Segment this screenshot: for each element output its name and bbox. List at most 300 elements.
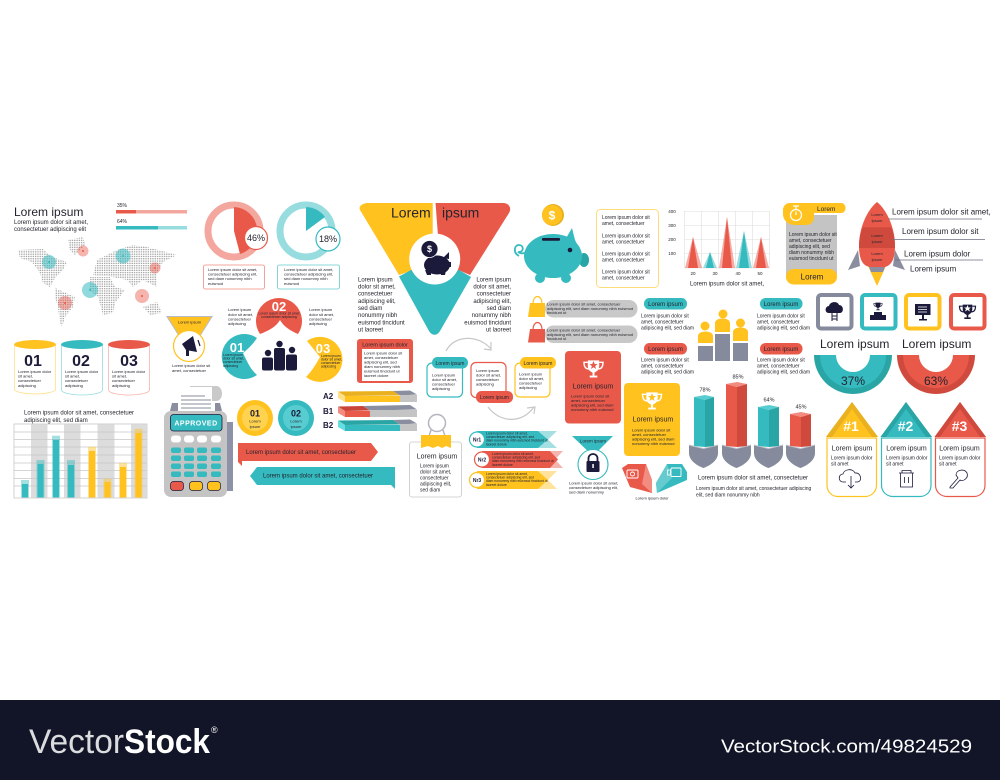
coin 01: 01 bbox=[250, 408, 260, 418]
coin 02: 02 bbox=[291, 408, 301, 418]
funnel title: ipsum bbox=[442, 204, 479, 220]
funnel right text: Lorem ipsum bbox=[476, 278, 511, 284]
half donut 37%: 37% bbox=[841, 374, 865, 388]
cycle diagram with people: adipiscing bbox=[228, 321, 246, 326]
stopwatch card bbox=[783, 203, 846, 284]
half donut 63%: 63% bbox=[924, 374, 948, 388]
flow step yellow: consectetuer bbox=[519, 380, 543, 386]
funnel title: Lorem bbox=[391, 204, 431, 220]
cylinder 03: 03 bbox=[120, 353, 138, 370]
coin 01 bbox=[237, 400, 273, 436]
donut chart 46%: 46% bbox=[247, 233, 265, 243]
lock badge: sed diam nonummy bbox=[569, 490, 604, 494]
clipped note: Lorem ipsum bbox=[417, 454, 457, 460]
funnel segment red bbox=[436, 203, 510, 275]
flow step yellow: Lorem ipsum bbox=[519, 372, 543, 376]
trophy card red bbox=[565, 351, 621, 424]
area chart: 50 bbox=[757, 271, 763, 276]
ribbon Nr1: Nr1 bbox=[473, 438, 481, 444]
shopping list row yellow: tincidunt ut bbox=[547, 310, 567, 315]
cycle diagram with people: Lorem ipsum bbox=[309, 307, 333, 312]
icon tile: cloud money tree bbox=[818, 295, 852, 328]
icon: payment terminal bbox=[164, 386, 233, 497]
footer bar: Stock bbox=[124, 723, 210, 761]
trophy card yellow: amet, consectetuer bbox=[632, 432, 667, 437]
donut chart 18% bbox=[280, 205, 340, 257]
icon: gold coin: $ bbox=[549, 208, 556, 222]
card #2: Lorem ipsum dolor bbox=[886, 456, 928, 462]
cylinder 03: Lorem ipsum dolor bbox=[112, 369, 146, 374]
progress bars: 35% bbox=[117, 203, 128, 209]
clipped note: adipiscing elit, bbox=[420, 482, 451, 488]
cylinder 02 bbox=[61, 340, 103, 395]
ribbon Nr2: diam nonummy nibh euismod tincidunt ut bbox=[492, 459, 554, 463]
card #1 bbox=[826, 402, 878, 496]
segment 01: adipiscing bbox=[223, 364, 238, 368]
ribbon Nr3 bbox=[470, 471, 557, 489]
cylinder 01: 01 bbox=[24, 353, 42, 370]
ribbon Nr1 bbox=[470, 431, 557, 448]
icon: piggy bank in circle bbox=[409, 234, 460, 284]
ribbon Nr1: diam nonummy nibh euismod tincidunt ut bbox=[486, 438, 548, 442]
text box teal: Lorem ipsum dolor sit amet, bbox=[284, 267, 333, 272]
icon: piggy bank in circle: $ bbox=[427, 244, 432, 254]
half donut 37% bbox=[814, 337, 892, 394]
flow step red: Lorem ipsum bbox=[476, 368, 500, 373]
card #3: sit amet bbox=[939, 462, 957, 468]
red text callout: Lorem ipsum dolor sit bbox=[364, 350, 403, 356]
ribbon Nr2: Nr2 bbox=[478, 458, 486, 464]
rocket bbox=[848, 202, 905, 286]
funnel left text: consectetuer bbox=[358, 292, 392, 298]
cylinder 03: consectetuer bbox=[112, 378, 136, 383]
rocket: ipsum bbox=[872, 257, 883, 262]
ribbon teal: Lorem ipsum dolor sit amet, consectetuer bbox=[263, 474, 373, 480]
funnel right text: consectetuer bbox=[477, 292, 511, 298]
funnel left text: ut laoreet bbox=[358, 328, 383, 334]
funnel right text bbox=[464, 278, 511, 334]
megaphone funnel badge: Lorem ipsum dolor sit bbox=[172, 363, 211, 368]
ribbon Nr2: Lorem ipsum dolor sit amet, bbox=[492, 452, 534, 456]
arrow: flow bottom bbox=[488, 407, 535, 419]
funnel right text: adipiscing elit, bbox=[473, 299, 511, 305]
funnel right text: euismod tincidunt bbox=[464, 320, 511, 326]
text box teal: consectetuer adipiscing elit, bbox=[284, 272, 333, 277]
card #3: #3 bbox=[952, 418, 967, 434]
ribbon Nr2 bbox=[474, 451, 563, 468]
stopwatch card: Lorem ipsum dolor sit bbox=[789, 232, 837, 238]
ribbon Nr3: diam nonummy nibh euismod tincidunt ut bbox=[486, 479, 548, 483]
arrow: flow top bbox=[446, 338, 491, 351]
bar B2: B2 bbox=[323, 421, 334, 430]
stopwatch card: Lorem bbox=[817, 206, 835, 213]
funnel left text: dolor sit amet, bbox=[358, 284, 396, 290]
clipped note: Lorem ipsum bbox=[420, 464, 449, 470]
bar 78%: 78% bbox=[699, 388, 711, 394]
rocket labels: Lorem ipsum dolor sit amet, bbox=[892, 208, 991, 216]
camera gem icons bbox=[622, 464, 687, 500]
lock badge: consectetuer adipiscing elit, bbox=[569, 485, 618, 490]
podium label red right: amet, consectetuer bbox=[757, 364, 800, 370]
ribbon Nr1: consectetuer adipiscing elit, sed bbox=[486, 435, 534, 439]
podium label red right bbox=[757, 343, 810, 376]
podium label teal left: Lorem ipsum bbox=[648, 302, 683, 308]
cylinder 03 bbox=[108, 340, 150, 395]
podium label teal right: amet, consectetuer bbox=[757, 320, 800, 326]
segment 03 bbox=[306, 337, 342, 382]
podium label teal left: Lorem ipsum dolor sit bbox=[641, 314, 689, 320]
text box red bbox=[204, 265, 264, 289]
rocket labels: Lorem ipsum dolor bbox=[904, 250, 971, 258]
list box: amet, consectetuer bbox=[602, 221, 645, 227]
3D bar chart bbox=[689, 374, 815, 468]
bar 45%: 45% bbox=[795, 404, 807, 410]
podium label red left bbox=[641, 343, 694, 376]
flow step teal: adipiscing bbox=[432, 386, 450, 391]
podium label teal right bbox=[757, 298, 810, 332]
footer bar: ® bbox=[211, 725, 218, 735]
segment 01: dolor sit amet, bbox=[223, 356, 244, 360]
ribbon Nr2: consectetuer adipiscing elit, sed bbox=[492, 456, 540, 460]
clipped note bbox=[410, 414, 462, 497]
bar chart bbox=[14, 424, 147, 498]
trophy card red: Lorem ipsum bbox=[573, 384, 613, 390]
funnel left text: nonummy nibh bbox=[358, 313, 397, 319]
flow step teal: Lorem ipsum bbox=[436, 361, 464, 367]
flow step red bbox=[471, 362, 513, 403]
ribbon Nr3: consectetuer adipiscing elit, sed bbox=[486, 476, 534, 480]
half donut 63% bbox=[897, 337, 975, 394]
3D bar chart caption: Lorem ipsum dolor sit amet, consectetuer adipiscing bbox=[696, 486, 812, 492]
rocket: Lorem bbox=[871, 251, 883, 256]
flow step red: adipiscing bbox=[476, 382, 494, 386]
cycle diagram with people: consectetuer bbox=[228, 316, 252, 322]
rocket labels bbox=[888, 208, 991, 274]
flow step teal: Lorem ipsum bbox=[432, 372, 456, 378]
megaphone funnel badge: Lorem ipsum bbox=[178, 320, 202, 324]
area chart: 200 bbox=[668, 237, 676, 242]
card #1: Lorem ipsum dolor bbox=[831, 456, 873, 462]
coin 01: ipsum bbox=[250, 424, 261, 429]
shopping list row yellow bbox=[528, 296, 638, 318]
funnel left text: adipiscing elit, bbox=[358, 299, 396, 305]
red text callout bbox=[357, 339, 413, 383]
text box red: Lorem ipsum dolor sit amet, bbox=[208, 267, 257, 272]
card #1: #1 bbox=[843, 418, 859, 434]
segment 01: 01 bbox=[230, 340, 244, 355]
ribbon Nr3: Nr3 bbox=[473, 478, 481, 484]
world map with location markers bbox=[18, 237, 177, 327]
funnel left text: euismod tincidunt bbox=[358, 320, 405, 326]
3D stacked bars bbox=[323, 390, 417, 431]
podium label teal left bbox=[641, 298, 694, 332]
ribbon teal bbox=[250, 467, 395, 489]
trophy card yellow: nonummy nibh euismod bbox=[632, 441, 674, 446]
stopwatch card: euismod tincidunt ut bbox=[789, 256, 834, 262]
megaphone funnel badge bbox=[166, 316, 213, 373]
cycle diagram with people: Lorem ipsum bbox=[228, 307, 252, 312]
text box red: euismod bbox=[208, 281, 223, 286]
shopping list row yellow: adipiscing elit, sed diam nonummy nibh euismod bbox=[547, 306, 633, 311]
heading: world map title bbox=[14, 205, 88, 233]
red text callout: Lorem ipsum dolor bbox=[362, 342, 408, 348]
donut chart 18%: 18% bbox=[319, 234, 337, 244]
cylinder 03: sit amet, bbox=[112, 374, 127, 378]
segment 03: 03 bbox=[316, 341, 330, 356]
flow step teal: consectetuer bbox=[432, 382, 456, 386]
camera gem icons: Lorem ipsum dolor bbox=[635, 496, 669, 500]
rocket: ipsum bbox=[872, 239, 883, 244]
segment 01: consectetuer bbox=[223, 360, 243, 364]
cylinder 02: 02 bbox=[72, 353, 90, 370]
coin 02: Lorem bbox=[290, 418, 302, 424]
podium label red right: Lorem ipsum dolor sit bbox=[757, 358, 805, 364]
footer bar: Vector bbox=[29, 723, 124, 761]
icon: people bbox=[262, 341, 297, 370]
text box teal: sed diam nonummy nibh bbox=[284, 276, 328, 281]
3D bar chart caption bbox=[696, 476, 812, 498]
trophy card yellow: Lorem ipsum bbox=[633, 416, 673, 424]
shopping list row red bbox=[528, 322, 638, 343]
trophy card yellow: adipiscing elit, sed diam bbox=[632, 436, 675, 442]
progress bars bbox=[116, 203, 187, 230]
icon: people on podium bbox=[698, 310, 748, 361]
segment 03: dolor sit amet, bbox=[321, 358, 342, 362]
funnel right text: sed diam bbox=[487, 306, 511, 312]
segment 03: adipiscing bbox=[321, 364, 336, 368]
podium label red left: Lorem ipsum bbox=[648, 347, 683, 353]
coin 02 bbox=[278, 400, 314, 436]
footer bar: VectorStock.com/49824529 bbox=[721, 736, 972, 756]
area chart: 20 bbox=[690, 271, 696, 276]
podium label red left: Lorem ipsum dolor sit bbox=[641, 358, 689, 364]
card #1: Lorem ipsum bbox=[832, 446, 872, 452]
card #2 bbox=[880, 402, 932, 496]
stopwatch card: adipiscing elit, sed bbox=[789, 244, 830, 250]
rocket labels: Lorem ipsum bbox=[910, 264, 957, 274]
icon: key bbox=[950, 470, 967, 488]
funnel right text: ut laoreet bbox=[486, 328, 511, 334]
bar 64%: 64% bbox=[763, 398, 775, 404]
shopping list row red: tincidunt ut bbox=[547, 336, 567, 341]
icon: teal piggy bank bbox=[515, 228, 589, 283]
area chart bbox=[668, 209, 770, 288]
flow step red: consectetuer bbox=[476, 377, 500, 382]
cylinder 02: adipiscing bbox=[65, 383, 83, 388]
area chart: 40 bbox=[735, 271, 741, 276]
funnel left text: Lorem ipsum bbox=[358, 278, 393, 284]
cycle diagram with people: dolor sit amet, bbox=[228, 312, 253, 317]
cylinder 02: sit amet, bbox=[65, 374, 80, 378]
cycle diagram with people bbox=[222, 298, 342, 382]
red text callout: adipiscing elit, sed bbox=[364, 360, 397, 364]
cylinder 02: consectetuer bbox=[65, 378, 89, 383]
segment 02: consectetuer adipiscing bbox=[261, 315, 297, 319]
flow step red: Lorem ipsum bbox=[480, 395, 509, 401]
segment 02: 02 bbox=[272, 299, 286, 314]
area chart: 30 bbox=[712, 271, 718, 276]
icon tile: presentation board bbox=[906, 295, 940, 328]
funnel left text bbox=[358, 278, 405, 334]
icon: payment terminal: APPROVED bbox=[174, 420, 218, 428]
funnel heading bbox=[360, 203, 433, 275]
half donut 63%: Lorem ipsum bbox=[902, 337, 971, 351]
stopwatch card: Lorem bbox=[801, 272, 824, 282]
heading: world map title: Lorem ipsum dolor sit amet, bbox=[14, 220, 88, 226]
area chart: Lorem ipsum dolor sit amet, bbox=[690, 282, 764, 288]
list box: Lorem ipsum dolor sit bbox=[602, 234, 650, 240]
funnel segment yellow bbox=[360, 203, 433, 275]
flow step red: dolor sit amet, bbox=[476, 372, 501, 378]
shopping list row red: adipiscing elit, sed diam nonummy nibh euismod bbox=[547, 332, 633, 337]
red text callout: amet, consectetuer bbox=[364, 355, 399, 360]
text box teal: euismod bbox=[284, 281, 299, 286]
clipped note: consectetuer bbox=[420, 476, 449, 482]
icon: gold coin bbox=[542, 204, 564, 226]
coin 02: ipsum bbox=[291, 424, 302, 429]
red text callout: diam nonummy nibh bbox=[364, 364, 400, 369]
trophy card yellow bbox=[624, 383, 680, 456]
lock badge: Lorem ipsum dolor sit amet, bbox=[569, 480, 618, 486]
ribbon Nr2: laoreet dolore bbox=[492, 463, 513, 467]
area chart: 100 bbox=[668, 251, 676, 256]
podium label teal right: adipiscing elit, sed diam bbox=[757, 326, 810, 332]
cycle diagram with people: adipiscing bbox=[309, 321, 327, 326]
flow step teal bbox=[427, 357, 468, 397]
icon: trash can bbox=[899, 470, 914, 487]
footer bar bbox=[0, 700, 1000, 780]
trophy card red: Lorem ipsum dolor sit bbox=[571, 394, 610, 398]
card #2: sit amet bbox=[886, 462, 904, 468]
trophy card yellow: Lorem ipsum dolor sit bbox=[632, 428, 671, 432]
cylinder 01: sit amet, bbox=[18, 374, 33, 378]
podium label red right: Lorem ipsum bbox=[764, 347, 798, 353]
podium label red left: amet, consectetuer bbox=[641, 364, 684, 370]
megaphone funnel badge: amet, consectetuer bbox=[172, 368, 207, 373]
funnel right text: dolor sit amet, bbox=[473, 284, 511, 290]
funnel left text: sed diam bbox=[358, 306, 382, 312]
flow step teal: dolor sit amet, bbox=[432, 377, 457, 382]
cylinder 01: consectetuer bbox=[18, 378, 42, 383]
list box: amet, consectetuer bbox=[602, 240, 645, 246]
podium label red left: adipiscing elit, sed diam bbox=[641, 370, 694, 376]
card #1: sit amet bbox=[831, 462, 849, 468]
half donut 37%: Lorem ipsum bbox=[820, 337, 889, 351]
rocket: Lorem bbox=[871, 212, 883, 217]
card #3: Lorem ipsum dolor bbox=[939, 456, 981, 462]
text box teal bbox=[278, 265, 340, 289]
segment 03: Lorem ipsum bbox=[321, 354, 341, 358]
funnel segment teal bbox=[399, 270, 471, 335]
bar chart caption bbox=[24, 410, 134, 424]
ribbon Nr1: Lorem ipsum dolor sit amet, bbox=[486, 432, 528, 436]
trophy card red: amet, consectetuer bbox=[571, 398, 606, 403]
flow step yellow: adipiscing bbox=[519, 385, 537, 390]
ribbon red bbox=[238, 443, 378, 466]
icon tile: star trophy bbox=[951, 295, 984, 328]
icon: cloud download bbox=[839, 470, 861, 488]
funnel right text: nonummy nibh bbox=[472, 313, 511, 319]
segment 02 bbox=[256, 298, 302, 334]
bar 85%: 85% bbox=[732, 374, 744, 380]
podium label teal left: amet, consectetuer bbox=[641, 320, 684, 326]
cycle diagram with people: consectetuer bbox=[309, 316, 333, 322]
bar A2: A2 bbox=[323, 392, 334, 401]
progress bars: 64% bbox=[117, 219, 128, 225]
3D bar chart caption: Lorem ipsum dolor sit amet, consectetuer bbox=[698, 476, 808, 482]
bar chart caption: Lorem ipsum dolor sit amet, consectetuer bbox=[24, 410, 134, 416]
cylinder 01: adipiscing bbox=[18, 383, 36, 388]
segment 01 bbox=[222, 334, 257, 379]
podium label teal left: adipiscing elit, sed diam bbox=[641, 326, 694, 332]
area chart: 300 bbox=[668, 223, 676, 228]
list box: amet, consectetuer bbox=[602, 276, 645, 282]
stopwatch card: amet, consectetuer bbox=[789, 238, 832, 244]
segment 01: Lorem ipsum bbox=[223, 353, 243, 357]
area chart: 400 bbox=[668, 209, 676, 214]
list box bbox=[596, 210, 658, 288]
card #3: Lorem ipsum bbox=[939, 446, 980, 452]
red text callout: laoreet dolore bbox=[364, 373, 389, 378]
heading: world map title: Lorem ipsum bbox=[14, 205, 83, 219]
lock badge: Lorem ipsum bbox=[580, 438, 606, 444]
card #2: Lorem ipsum bbox=[886, 446, 927, 452]
icon tile: podium trophy bbox=[862, 295, 896, 328]
bar B1: B1 bbox=[323, 407, 334, 416]
podium label red right: adipiscing elit, sed diam bbox=[757, 370, 810, 376]
cylinder 01: Lorem ipsum dolor bbox=[18, 369, 52, 374]
card #2: #2 bbox=[898, 418, 913, 434]
lock badge bbox=[569, 436, 618, 494]
funnel title bbox=[391, 204, 479, 220]
list box: Lorem ipsum dolor sit bbox=[602, 252, 650, 258]
coin 01: Lorem bbox=[249, 418, 261, 424]
ribbon Nr3: Lorem ipsum dolor sit amet, bbox=[486, 472, 528, 476]
rocket: ipsum bbox=[872, 218, 883, 223]
trophy card red: nonummy nibh euismod bbox=[571, 407, 613, 412]
ribbon Nr1: laoreet dolore bbox=[486, 442, 507, 446]
podium label teal right: Lorem ipsum bbox=[764, 302, 798, 308]
ribbon Nr3: laoreet dolore bbox=[486, 483, 507, 487]
bar chart caption: adipiscing elit, sed diam bbox=[24, 418, 88, 424]
red text callout: euismod tincidunt ut bbox=[364, 368, 400, 374]
cylinder 02: Lorem ipsum dolor bbox=[65, 369, 99, 374]
clipped note: dolor sit amet, bbox=[420, 470, 451, 476]
heading: world map title: consectetuer adipiscing elit bbox=[14, 227, 86, 233]
shopping list row red: Lorem ipsum dolor sit amet, consectetuer bbox=[547, 328, 621, 332]
list box: Lorem ipsum dolor sit bbox=[602, 215, 650, 221]
trophy card red: adipiscing elit, sed diam bbox=[571, 402, 614, 408]
flow step yellow: dolor sit amet, bbox=[519, 376, 544, 381]
shopping list row yellow: Lorem ipsum dolor sit amet, consectetuer bbox=[547, 302, 621, 306]
segment 03: consectetuer bbox=[321, 361, 341, 365]
card #3 bbox=[934, 402, 986, 496]
list box: Lorem ipsum dolor sit bbox=[602, 270, 650, 276]
donut chart 46% bbox=[208, 205, 268, 257]
3D bar chart caption: elit, sed diam nonummy nibh bbox=[696, 492, 760, 498]
podium label teal right: Lorem ipsum dolor sit bbox=[757, 314, 805, 320]
cylinder 03: adipiscing bbox=[112, 383, 130, 388]
clipped note: sed diam bbox=[420, 488, 440, 494]
list box: amet, consectetuer bbox=[602, 258, 645, 264]
stopwatch card: diam nonummy nibh bbox=[789, 250, 834, 256]
cycle diagram with people: dolor sit amet, bbox=[309, 312, 334, 317]
flow step yellow: Lorem ipsum bbox=[524, 361, 552, 367]
ribbon red: Lorem ipsum dolor sit amet, consectetuer bbox=[246, 450, 356, 456]
rocket labels: Lorem ipsum dolor sit bbox=[902, 227, 979, 236]
segment 02: Lorem ipsum dolor sit amet bbox=[259, 312, 299, 316]
rocket: Lorem bbox=[871, 233, 883, 238]
